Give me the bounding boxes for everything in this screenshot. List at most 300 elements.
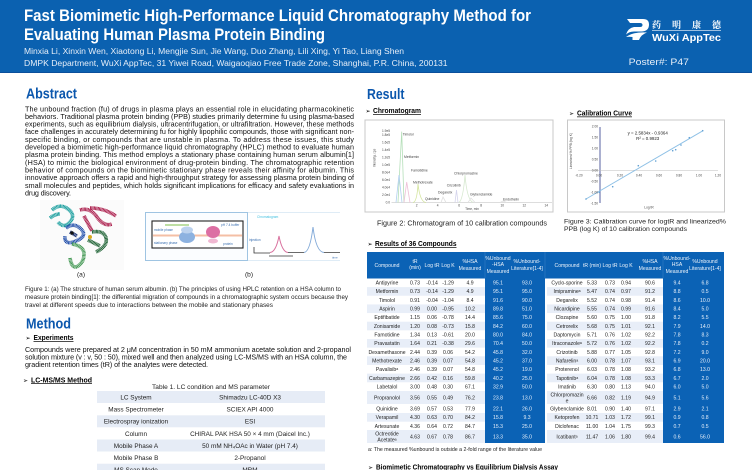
abstract text: behaviors. Traditional plasma protein binding (PPB) studies primarily determine fu using plasma-based: [25, 112, 354, 121]
table header: tR: [412, 259, 418, 265]
right half rows: 92.8: [645, 350, 655, 356]
highlighted unbound columns: [485, 252, 724, 443]
figure 1 caption: measure protein binding[1]: the differential migration of compounds in a chromatographic system occurs because they: [25, 294, 349, 301]
right half rows: 5.71: [587, 332, 597, 338]
right half rows: 8.4: [673, 306, 681, 312]
right half rows: 99.4: [645, 434, 655, 440]
right half rows: 1.80: [621, 434, 631, 440]
axis numbers: 1.4e5: [382, 148, 390, 152]
logo: WuXi AppTec: WuXi AppTec: [652, 33, 722, 44]
left half rows: -0.38: [442, 341, 454, 347]
right half rows: 7.8: [673, 332, 681, 338]
right half rows: 1.04: [605, 424, 615, 430]
right half rows: 8.6: [673, 298, 681, 304]
left half rows: 26.0: [522, 406, 532, 412]
left half rows: 32.0: [522, 350, 532, 356]
experiments text: [25, 345, 351, 369]
axis numbers: 6: [458, 204, 460, 208]
left half rows: 0.64: [427, 424, 437, 430]
left half rows: Quinidine: [376, 406, 398, 412]
title: Fast Biomimetic High-Performance Liquid Chromatography Method for: [24, 7, 532, 25]
table header: %Unbound: [692, 259, 718, 265]
left half rows: -0.61: [442, 332, 454, 338]
figure 1b: HPLC retention principle: protein: [223, 242, 233, 246]
axis numbers: 4.0e4: [382, 186, 390, 190]
right half rows: 5.1: [673, 396, 681, 402]
right half rows: Icatibantᵃ: [556, 434, 578, 440]
left half rows: 15.8: [465, 324, 475, 330]
left half rows: 1.64: [410, 341, 420, 347]
right half rows: 1.13: [621, 384, 631, 390]
right half rows: 7.8: [673, 341, 681, 347]
left half rows: Eptifibatide: [374, 315, 400, 321]
table header: %Unbound-: [664, 256, 691, 262]
left half rows: 14.4: [465, 315, 475, 321]
table 1: LC and MS parameters: [97, 391, 325, 470]
table 1: LC and MS parameters: Mass Spectrometer: [108, 407, 165, 414]
left half rows: 15.8: [493, 415, 503, 421]
left half rows: Pavalisibᵃ: [376, 367, 398, 373]
table header: Compound: [555, 263, 580, 269]
left half rows: 0.21: [427, 341, 437, 347]
abstract text: innovative approach offers a rapid and high-throughput strategy for assessing plasma protein binding of: [25, 173, 354, 182]
chart: chromatogram of 10 calibration compounds: Intensity, cps: [372, 148, 376, 167]
left half rows: 45.2: [493, 367, 503, 373]
left half rows: 0.67: [427, 434, 437, 440]
abstract text: specific binding, or compounds that are unstable in plasma. To address these issues, this study: [25, 135, 354, 144]
right half rows: 0.5: [701, 289, 709, 295]
subheading: calibration curve: ➢: [569, 112, 574, 118]
right half rows: 2.1: [701, 406, 709, 412]
right half rows: 10.71: [586, 415, 599, 421]
left half rows: 67.1: [465, 384, 475, 390]
table 1: LC and MS parameters: 50 mM NH₄OAc in Water (pH 7.4): [202, 443, 298, 450]
right half rows: 0.74: [605, 298, 615, 304]
subheading: results of 36 compounds: ➢: [368, 242, 373, 248]
right half rows: Nafarelinᵃ: [556, 358, 578, 364]
title: [24, 7, 532, 44]
right half rows: 9.4: [673, 281, 681, 287]
right half rows: Glybenclamide: [550, 406, 584, 412]
left half rows: 0.07: [443, 367, 453, 373]
left half rows: 22.1: [493, 406, 503, 412]
right half rows: 0.98: [621, 298, 631, 304]
axis numbers: -1.50: [591, 202, 598, 206]
heading: method: Method: [26, 316, 71, 332]
peak labels: [403, 132, 519, 202]
left half rows: 0.13: [427, 332, 437, 338]
left half rows: 70.4: [493, 341, 503, 347]
left half rows: Methotrexate: [372, 358, 402, 364]
axis numbers: 6.0e4: [382, 178, 390, 182]
right half rows: 1.08: [621, 376, 631, 382]
left half rows: 37.0: [522, 358, 532, 364]
right half rows: 0.97: [621, 289, 631, 295]
right half rows: 5.47: [587, 289, 597, 295]
right half rows: 5.52: [587, 298, 597, 304]
left half rows: Dexamethasone: [368, 350, 406, 356]
abstract text: plasma protein binding. This method employs a stationary phase containing human serum albumin[1]: [25, 150, 354, 159]
right half rows: 0.6: [673, 434, 681, 440]
authors and affiliation: Minxia Li, Xinxin Wen, Xiaotong Li, Mengjie Sun, Jie Wang, Duo Zhang, Lili Xing, Yi Tao, Liang Shen: [24, 47, 404, 56]
axis numbers: 12: [522, 204, 526, 208]
left half rows: 0.78: [443, 434, 453, 440]
left half rows: 0.39: [427, 358, 437, 364]
left half rows: 20.0: [465, 332, 475, 338]
left half rows: 1.15: [410, 315, 420, 321]
abstract text: experiments, such as equilibrium dialysis, ultracentrifugation, or ultrafiltration. However, these methods: [25, 120, 354, 128]
subheading: calibration curve: Calibration Curve: [577, 110, 632, 118]
right half rows: Cyclo-sporine: [551, 281, 583, 287]
table header: Log tR: [602, 263, 618, 269]
left half rows: 19.0: [522, 367, 532, 373]
left half rows: Acetateᵃ: [377, 438, 397, 444]
table header: Compound: [375, 263, 400, 269]
left half rows: Octreotide: [375, 432, 399, 438]
right half rows: 0.78: [605, 376, 615, 382]
left half rows: 89.8: [493, 306, 503, 312]
table 1: LC and MS parameters: CHIRAL PAK HSA 50 × 4 mm (Daicel Inc.): [190, 431, 310, 438]
table header: HSA: [672, 262, 683, 268]
right half rows: Clozapine: [556, 315, 578, 321]
left half rows: 0.91: [410, 298, 420, 304]
table header: tR (min): [583, 263, 601, 269]
right half rows: 0.7: [673, 424, 681, 430]
left half rows: 1.34: [410, 332, 420, 338]
left half rows: 40.2: [493, 376, 503, 382]
subheading: experiments: ➢: [26, 336, 31, 342]
right half rows: 93.3: [645, 376, 655, 382]
authors and affiliation: DMPK Department, WuXi AppTec, 31 Yiwei Road, Waigaoqiao Free Trade Zone, Shanghai, P.R. China, 200131: [24, 59, 448, 68]
left half rows: 0.06: [443, 350, 453, 356]
figure 1b: HPLC retention principle: pH 7.4 buffer: [221, 223, 240, 227]
right half rows: 1.06: [605, 434, 615, 440]
table 1: LC and MS parameters: LC System: [120, 394, 152, 402]
axis numbers: 1.0e5: [382, 163, 390, 167]
axis numbers: 1.2e5: [382, 156, 390, 160]
left half rows: 3.56: [410, 396, 420, 402]
right half rows: 5.6: [701, 396, 709, 402]
right half rows: 5.88: [587, 350, 597, 356]
left half rows: 15.3: [493, 424, 503, 430]
table 1: LC and MS parameters: Column: [125, 431, 147, 438]
left half rows: 0.55: [427, 396, 437, 402]
left half rows: 51.0: [522, 306, 532, 312]
left half rows: 0.73: [410, 289, 420, 295]
chart: chromatogram of 10 calibration compounds: Time, min: [465, 207, 479, 211]
left half rows: Aspirin: [379, 306, 395, 312]
peaks: [396, 132, 507, 202]
heading: result: Result: [367, 86, 405, 103]
left half rows: 0.08: [427, 324, 437, 330]
axis numbers: 2: [416, 204, 418, 208]
title: Evaluating Human Plasma Protein Binding: [24, 26, 325, 44]
left half rows: -0.14: [426, 289, 438, 295]
table header: -HSA: [492, 262, 505, 268]
left half rows: 90.0: [522, 298, 532, 304]
left half rows: 77.9: [465, 406, 475, 412]
chart: chromatogram of 10 calibration compounds: [365, 120, 553, 212]
right half rows: 8.8: [673, 289, 681, 295]
peak labels: Endothelin: [503, 198, 519, 202]
left half rows: 0.63: [427, 415, 437, 421]
right half rows: 91.6: [645, 306, 655, 312]
subheading: experiments: Experiments: [34, 335, 74, 342]
right half rows: 56.0: [700, 434, 710, 440]
axis numbers: 10: [500, 204, 504, 208]
peak labels: Metformin: [404, 155, 419, 159]
left half rows: 95.0: [522, 289, 532, 295]
right half rows: 0.99: [621, 306, 631, 312]
left half rows: 0.53: [443, 406, 453, 412]
subheading: LC-MS/MS method: LC-MS/MS Method: [31, 377, 92, 384]
left half rows: Metformin: [376, 289, 398, 295]
figure 2 caption: Figure 2: Chromatogram of 10 calibration compounds: [377, 220, 547, 228]
left half rows: 86.7: [465, 434, 475, 440]
left half rows: 23.8: [493, 396, 503, 402]
right half rows: 6.9: [673, 358, 681, 364]
right half rows: 0.9: [673, 415, 681, 421]
left half rows: 2.44: [410, 350, 420, 356]
abstract text: developed a biomimetic high-performance liquid chromatography (HPLC) method to evaluate human: [25, 142, 354, 152]
experiments text: gradient retention times (tR) of the analytes were detected.: [25, 360, 208, 369]
left half rows: 25.0: [522, 376, 532, 382]
figure 1b: HPLC retention principle: stationary phase: [154, 241, 178, 245]
right half rows: Diclofenac: [555, 424, 579, 430]
left half rows: 29.6: [465, 341, 475, 347]
right half rows: 1.40: [621, 406, 631, 412]
left half rows: 84.7: [465, 424, 475, 430]
left half rows: 2.46: [410, 358, 420, 364]
left half rows: 0.48: [427, 384, 437, 390]
axis numbers: 0.00: [592, 168, 598, 172]
label (b): (b): [245, 272, 253, 278]
left half rows: 84.2: [493, 324, 503, 330]
abstract text: (HSA) to mimic the biological environment of drug-protein binding. The chromatographic retention: [25, 158, 354, 167]
right half rows: 0.80: [605, 384, 615, 390]
left half rows: 9.3: [523, 415, 531, 421]
table header: Measured: [666, 269, 688, 275]
left half rows: 8.4: [466, 298, 474, 304]
left half rows: -1.29: [442, 281, 454, 287]
right half rows: 9.0: [701, 350, 709, 356]
right half rows: 13.0: [700, 367, 710, 373]
table 1: LC and MS parameters: ESI: [245, 419, 255, 426]
left half rows: 0.39: [427, 350, 437, 356]
left half rows: 59.8: [465, 376, 475, 382]
peak labels: Methotrexate: [413, 180, 433, 184]
right half rows: 0.8: [701, 415, 709, 421]
subheading: LC-MS/MS method: ➢: [23, 378, 28, 384]
left half rows: 0.00: [427, 306, 437, 312]
left half rows: 54.8: [465, 358, 475, 364]
right half rows: 0.78: [605, 358, 615, 364]
right half rows: 90.6: [645, 281, 655, 287]
table header: Measured: [487, 269, 509, 275]
table header: %Unbound: [485, 256, 511, 262]
chart: calibration curve: Log tR: [644, 206, 654, 210]
left half rows: 54.8: [465, 367, 475, 373]
right half rows: 1.02: [621, 332, 631, 338]
left half rows: 60.0: [522, 324, 532, 330]
right half rows: 0.5: [701, 424, 709, 430]
peak labels: Crizotinib: [447, 184, 461, 188]
left half rows: 13.0: [522, 396, 532, 402]
right half rows: 0.77: [605, 350, 615, 356]
right half rows: 7.9: [673, 324, 681, 330]
right half rows: 99.1: [645, 415, 655, 421]
left half rows: 0.42: [427, 376, 437, 382]
left half rows: 50.0: [522, 384, 532, 390]
right half rows: 91.4: [645, 298, 655, 304]
axis numbers: 14: [544, 204, 548, 208]
table bands: [367, 287, 663, 443]
left half rows: -0.95: [442, 306, 454, 312]
table header: Measured: [639, 266, 661, 272]
left half rows: 76.2: [465, 396, 475, 402]
left half rows: 0.72: [443, 424, 453, 430]
right half rows: 5.60: [587, 315, 597, 321]
right half rows: 5.33: [587, 281, 597, 287]
panel: method: [23, 316, 351, 470]
left half rows: 4.9: [466, 281, 474, 287]
right half rows: 0.2: [701, 341, 709, 347]
right half rows: 92.1: [645, 324, 655, 330]
logo: WuXi AppTec: [626, 18, 722, 44]
right half rows: 6.03: [587, 367, 597, 373]
left half rows: 91.6: [493, 298, 503, 304]
figure 1 caption: travel at different speeds due to interactions between the mobile and stationary phases: [25, 302, 274, 309]
right half rows: 5.72: [587, 341, 597, 347]
right half rows: 94.9: [645, 396, 655, 402]
left half rows: 1.20: [410, 324, 420, 330]
table 1: LC and MS parameters: Mobile Phase B: [114, 455, 158, 462]
axis numbers: -0.50: [591, 180, 598, 184]
figure 1b: HPLC retention principle: time: [332, 256, 338, 260]
right half rows: Cetrorelix: [556, 324, 578, 330]
right half rows: Proterenol: [555, 367, 579, 373]
left half rows: 85.6: [493, 315, 503, 321]
abstract text: [25, 104, 355, 197]
right half rows: 91.2: [645, 289, 655, 295]
axis numbers: 1.20: [715, 174, 721, 178]
table: results of 36 compounds: [367, 252, 724, 444]
axis numbers: 2.0e4: [382, 193, 390, 197]
right half rows: 14.0: [700, 324, 710, 330]
right half rows: 93.2: [645, 367, 655, 373]
left half rows: 4.63: [410, 434, 420, 440]
chart: calibration curve: Linearized % PPB (log K): [569, 133, 573, 169]
right half rows: 20.0: [700, 358, 710, 364]
left half rows: 84.0: [522, 332, 532, 338]
axis numbers: 1.00: [696, 174, 702, 178]
right half rows: 6.04: [587, 376, 597, 382]
right half rows: 8.3: [701, 332, 709, 338]
left half rows: 0.57: [427, 406, 437, 412]
abstract text: small molecules and peptides, which holds significant implications for efficacy and safety evaluations in: [25, 181, 354, 190]
peak labels: Quinidine: [425, 197, 439, 201]
chart: calibration curve: [568, 120, 724, 212]
left half rows: 4.36: [410, 424, 420, 430]
right half rows: 5.0: [701, 306, 709, 312]
right half rows: Nicardipine: [554, 306, 580, 312]
left half rows: 0.73: [410, 281, 420, 287]
left half rows: Labetalol: [377, 384, 397, 390]
right half rows: Imipramineᵃ: [553, 289, 581, 295]
abstract text: The unbound fraction (fu) of drugs in plasma plays an essential role in elucidating pharmacokinetic: [25, 104, 354, 113]
table 1: LC and MS parameters: 2-Propanol: [234, 455, 266, 462]
left half rows: 3.00: [410, 384, 420, 390]
left half rows: 0.70: [443, 415, 453, 421]
subheading: chromatogram: Chromatogram: [373, 108, 421, 115]
right half rows: [550, 281, 710, 440]
right half rows: 1.07: [621, 358, 631, 364]
peak labels: Degarelix: [438, 190, 453, 194]
right half rows: 8.2: [673, 315, 681, 321]
left half rows: 3.69: [410, 406, 420, 412]
table header: [367, 252, 724, 278]
figure 1 caption: [25, 286, 349, 309]
table header: %HSA: [642, 259, 658, 265]
peak labels: Famotidine: [411, 168, 428, 172]
table header: Log tR: [424, 263, 440, 269]
right half rows: 5.0: [701, 384, 709, 390]
axis numbers: [382, 129, 548, 208]
axis numbers: 0.60: [656, 174, 662, 178]
right half rows: 11.00: [586, 424, 598, 430]
right half rows: 6.00: [587, 358, 597, 364]
figure 1b: HPLC retention principle: mobile phase: [154, 228, 173, 232]
table header: Log K: [619, 263, 633, 269]
left half rows: 75.0: [522, 315, 532, 321]
left half rows: -1.29: [442, 289, 454, 295]
label (a): (a): [77, 272, 85, 278]
peak labels: Glybenclamide: [470, 192, 493, 196]
right half rows: 1.02: [621, 341, 631, 347]
left half rows: 0.30: [443, 384, 453, 390]
axis numbers: 1.8e5: [382, 133, 390, 137]
left half rows: Timolol: [379, 298, 395, 304]
right half rows: Chlorpromazin: [550, 392, 584, 398]
left half rows: 35.0: [522, 434, 532, 440]
right half rows: 6.8: [673, 367, 681, 373]
right half rows: 99.3: [645, 424, 655, 430]
axis numbers: -0.20: [575, 174, 583, 178]
peak labels: Timolol: [403, 132, 414, 136]
left half rows: 80.0: [493, 332, 503, 338]
right half rows: 0.75: [605, 315, 615, 321]
figure 3 caption: [564, 218, 726, 233]
left half rows: -0.04: [426, 298, 438, 304]
right half rows: 0.76: [605, 341, 615, 347]
axis numbers: 8: [480, 204, 482, 208]
right half rows: 0.74: [605, 306, 615, 312]
data points: [585, 130, 704, 200]
left half rows: Propranolol: [374, 396, 400, 402]
axis numbers: 4: [437, 204, 439, 208]
right half rows: 2.9: [673, 406, 681, 412]
right half rows: 5.55: [587, 306, 597, 312]
right half rows: 6.66: [587, 396, 597, 402]
right half rows: 0.82: [605, 396, 615, 402]
right half rows: 10.0: [700, 298, 710, 304]
right half rows: 92.2: [645, 332, 655, 338]
right half rows: Ketoprofen: [555, 415, 580, 421]
right half rows: 6.30: [587, 384, 597, 390]
left half rows: 0.39: [427, 367, 437, 373]
table 1: LC and MS parameters: Shimadzu LC-40D X3: [219, 394, 281, 402]
right half rows: Itraconazoleᵃ: [552, 341, 582, 347]
